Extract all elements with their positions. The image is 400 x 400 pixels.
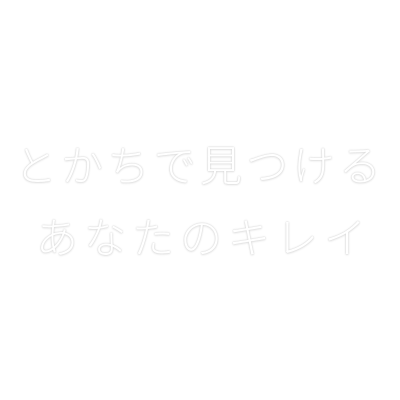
heading line 2: あなたのキレイ <box>36 215 372 262</box>
heading line 1: とかちで見つける <box>15 143 385 190</box>
